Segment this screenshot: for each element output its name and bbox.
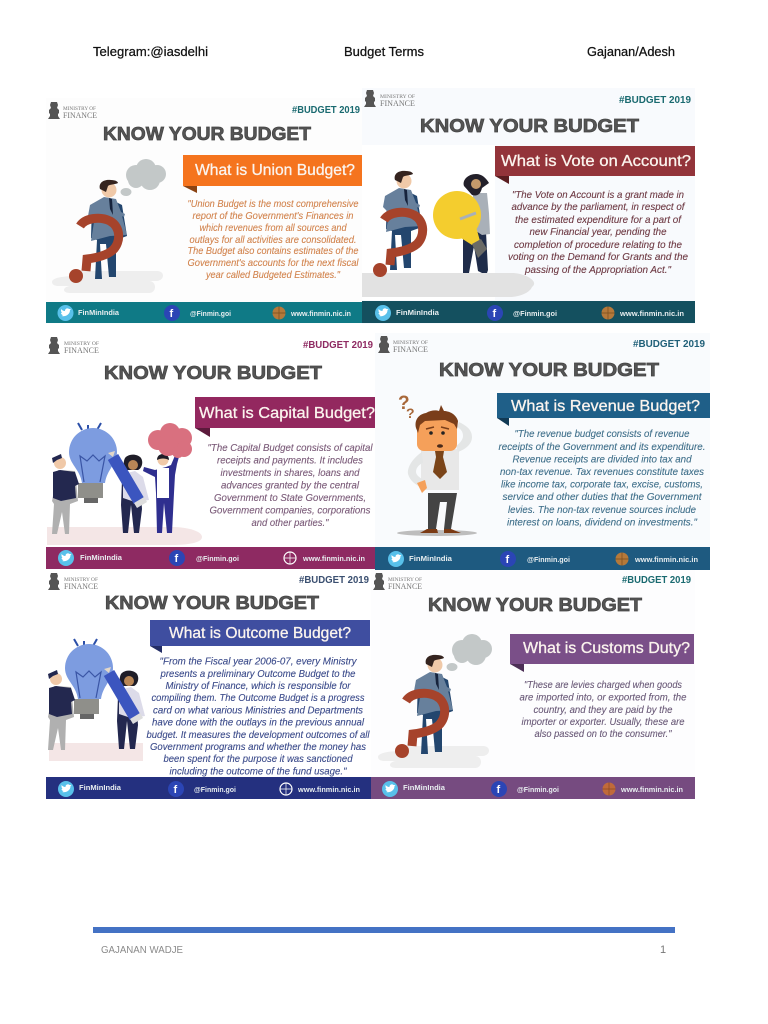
text block: "These are levies charged when goods: [524, 679, 683, 691]
illustration: confused man with question marks: [397, 393, 477, 536]
text block: non-tax revenue. Tax revenues constitute taxes: [500, 466, 705, 478]
text block: [498, 428, 706, 528]
text block: passing of the Appropriation Act.": [524, 264, 672, 276]
logo: Ministry of Finance: FINANCE: [393, 344, 428, 354]
text block: "The Capital Budget consists of capital: [208, 442, 373, 454]
text block: service and other duties that the Government: [502, 491, 703, 503]
text block: receipts of the Government and its expenditure.: [498, 441, 706, 453]
banner: What is Capital Budget?: [195, 397, 375, 437]
text block: and other parties.": [252, 517, 330, 529]
text block: [508, 189, 688, 276]
footer bar: [362, 301, 695, 323]
footer bar: www.finmin.nic.in: [634, 555, 698, 564]
logo: Ministry of Finance: [48, 337, 99, 355]
panel: Vote on Account: [362, 88, 695, 324]
footer bar: www.finmin.nic.in: [620, 785, 683, 794]
page footer: GAJANAN WADJE: [101, 944, 183, 956]
text block: voting on the Demand for Grants and the: [508, 251, 688, 263]
banner: What is Outcome Budget?: [150, 620, 370, 653]
heading: KNOW YOUR BUDGET: [105, 593, 319, 613]
footer bar: FinMinIndia: [409, 554, 453, 563]
text block: the estimated expenditure for a part of: [515, 214, 682, 226]
footer bar: @Finmin.goi: [194, 785, 236, 794]
text block: budget. It measures the development outcomes of all: [146, 729, 370, 741]
banner: What is Revenue Budget?: [497, 393, 710, 426]
text block: outlays for all activities are consolidated.: [190, 234, 356, 246]
footer bar: [371, 777, 695, 799]
footer bar: FinMinIndia: [79, 783, 122, 792]
text block: Revenue receipts are divided into tax and: [512, 454, 693, 466]
hashtag: #BUDGET 2019: [303, 339, 373, 351]
banner: What is Customs Duty?: [510, 634, 694, 672]
text block: advances granted by the central: [221, 480, 360, 492]
text block: compiling them. The Outcome Budget is a progress: [152, 692, 365, 704]
logo: Ministry of Finance: MINISTRY OF: [393, 341, 428, 346]
footer bar: www.finmin.nic.in: [297, 785, 360, 794]
page footer: 1: [660, 944, 666, 956]
page header: [93, 44, 675, 59]
text block: Government's accounts for the next fiscal: [188, 257, 359, 269]
illustration: man with question mark: [52, 159, 166, 293]
page header: Telegram:@iasdelhi: [93, 44, 208, 59]
logo: Ministry of Finance: MINISTRY OF: [380, 95, 415, 100]
text block: importer or exporter. Usually, these are: [522, 716, 685, 728]
illustration: man with question mark: [378, 634, 492, 768]
logo: Ministry of Finance: [378, 336, 428, 354]
banner: What is Outcome Budget?: What is Outcome Budget?: [169, 625, 351, 642]
text block: "From the Fiscal year 2006-07, every Ministry: [160, 656, 357, 668]
text block: like income tax, corporate tax, excise, customs,: [501, 478, 703, 490]
footer bar: FinMinIndia: [396, 308, 440, 317]
text block: report of the Government's Finances in: [192, 210, 354, 222]
heading: KNOW YOUR BUDGET: [428, 595, 642, 615]
text block: "The Vote on Account is a grant made in: [512, 189, 684, 201]
text block: [146, 656, 370, 778]
text block: "The revenue budget consists of revenue: [514, 428, 690, 440]
panel: Outcome Budget: [46, 570, 371, 799]
logo: Ministry of Finance: [48, 573, 98, 591]
logo: Ministry of Finance: FINANCE: [64, 581, 98, 591]
text block: The Budget also contains estimates of the: [188, 245, 359, 257]
text block: Government to State Governments,: [214, 492, 366, 504]
text block: investments in shares, loans and: [220, 467, 361, 479]
panel: Revenue Budget: [375, 333, 710, 570]
text block: Government companies, corporations: [210, 504, 371, 516]
hashtag: #BUDGET 2019: [622, 574, 691, 586]
logo: Ministry of Finance: [373, 573, 422, 591]
hashtag: #BUDGET 2019: [633, 338, 705, 350]
footer bar: www.finmin.nic.in: [290, 309, 351, 318]
illustration: people with light bulb and pencil: [48, 639, 145, 761]
text block: completion of procedure relating to the: [514, 239, 682, 251]
text block: [208, 442, 373, 529]
illustration: man with question mark and woman with yellow bulb: [362, 145, 534, 300]
banner: What is Union Budget?: What is Union Budget?: [195, 162, 355, 179]
logo: Ministry of Finance: MINISTRY OF: [64, 578, 98, 583]
footer bar: [46, 302, 362, 323]
text block: have done with the outlays in the previous annual: [152, 716, 365, 728]
logo: Ministry of Finance: FINANCE: [380, 98, 415, 108]
text block: Ministry of Finance, which is responsible for: [166, 680, 351, 692]
footer bar: f: [170, 308, 174, 320]
footer bar: [375, 547, 710, 570]
panel: Customs Duty: [371, 570, 695, 799]
text block: year called Budgeted Estimates.": [205, 269, 341, 281]
footer bar: www.finmin.nic.in: [302, 554, 365, 563]
logo: Ministry of Finance: MINISTRY OF: [63, 107, 96, 112]
footer bar: @Finmin.goi: [196, 554, 239, 563]
illustration: team with light bulb and brain: [47, 423, 202, 545]
footer bar: FinMinIndia: [80, 553, 123, 562]
text block: new Financial year, pending the: [530, 226, 667, 238]
banner: What is Revenue Budget?: What is Revenue Budget?: [511, 398, 700, 415]
banner: What is Capital Budget?: What is Capital Budget?: [199, 405, 375, 422]
footer bar: [46, 547, 375, 569]
text block: receipts and payments. It includes: [217, 454, 364, 466]
panel: Union Budget: [46, 98, 362, 324]
heading: KNOW YOUR BUDGET: [439, 360, 659, 380]
text block: are imported into, or exported from, the: [520, 692, 687, 704]
text block: Government programs and whether the money has: [150, 741, 367, 753]
logo: Ministry of Finance: [364, 90, 415, 108]
text block: including the outcome of the fund usage.": [170, 766, 348, 778]
text block: also passed on to the consumer.": [534, 728, 673, 740]
footer bar: f: [174, 553, 178, 565]
footer bar: @Finmin.goi: [513, 309, 557, 318]
illustration: confused man with question marks: ?: [406, 405, 415, 421]
illustration: confused man with question marks: ?: [398, 393, 410, 414]
footer bar: f: [506, 554, 510, 566]
heading: KNOW YOUR BUDGET: [420, 116, 639, 136]
page header: Budget Terms: [344, 44, 424, 59]
logo: Ministry of Finance: FINANCE: [63, 110, 97, 120]
text block: advance by the parliament, in respect of: [512, 201, 685, 213]
text block: been spent for the purpose it was sanctioned: [164, 753, 354, 765]
text block: presents a preliminary Outcome Budget to the: [160, 668, 356, 680]
text block: interest on loans, dividend on investments.": [507, 516, 698, 528]
footer bar: @Finmin.goi: [190, 309, 231, 318]
hashtag: #BUDGET 2019: [292, 104, 360, 116]
logo: Ministry of Finance: FINANCE: [64, 345, 99, 355]
footer bar: f: [174, 784, 178, 796]
banner: What is Customs Duty?: What is Customs Duty?: [523, 640, 690, 657]
text block: "Union Budget is the most comprehensive: [188, 198, 359, 210]
heading: KNOW YOUR BUDGET: [103, 124, 311, 144]
hashtag: #BUDGET 2019: [299, 574, 369, 586]
footer bar: @Finmin.goi: [517, 785, 559, 794]
footer bar: FinMinIndia: [78, 308, 120, 317]
footer bar: f: [492, 308, 496, 320]
banner: What is Union Budget?: [183, 155, 362, 193]
banner: What is Vote on Account?: What is Vote on Account?: [501, 153, 691, 170]
heading: KNOW YOUR BUDGET: [104, 363, 322, 383]
footer bar: www.finmin.nic.in: [619, 309, 684, 318]
logo: Ministry of Finance: FINANCE: [388, 581, 422, 591]
text block: [188, 198, 359, 281]
logo: Ministry of Finance: [48, 102, 97, 120]
hashtag: #BUDGET 2019: [619, 94, 691, 106]
text block: which revenues from all sources and: [200, 222, 347, 234]
text block: levies. The non-tax revenue sources include: [508, 504, 696, 516]
banner: What is Vote on Account?: [495, 146, 695, 184]
text block: country, and they are paid by the: [534, 704, 673, 716]
footer bar: @Finmin.goi: [527, 555, 570, 564]
footer bar: FinMinIndia: [403, 783, 446, 792]
page footer: [93, 927, 675, 956]
logo: Ministry of Finance: MINISTRY OF: [388, 578, 422, 583]
panel: Capital Budget: [46, 335, 375, 569]
text block: [520, 679, 687, 740]
page header: Gajanan/Adesh: [587, 44, 675, 59]
footer bar: [46, 777, 371, 799]
logo: Ministry of Finance: MINISTRY OF: [64, 342, 99, 347]
text block: card on what various Ministries and Departments: [153, 704, 364, 716]
footer bar: f: [496, 784, 500, 796]
